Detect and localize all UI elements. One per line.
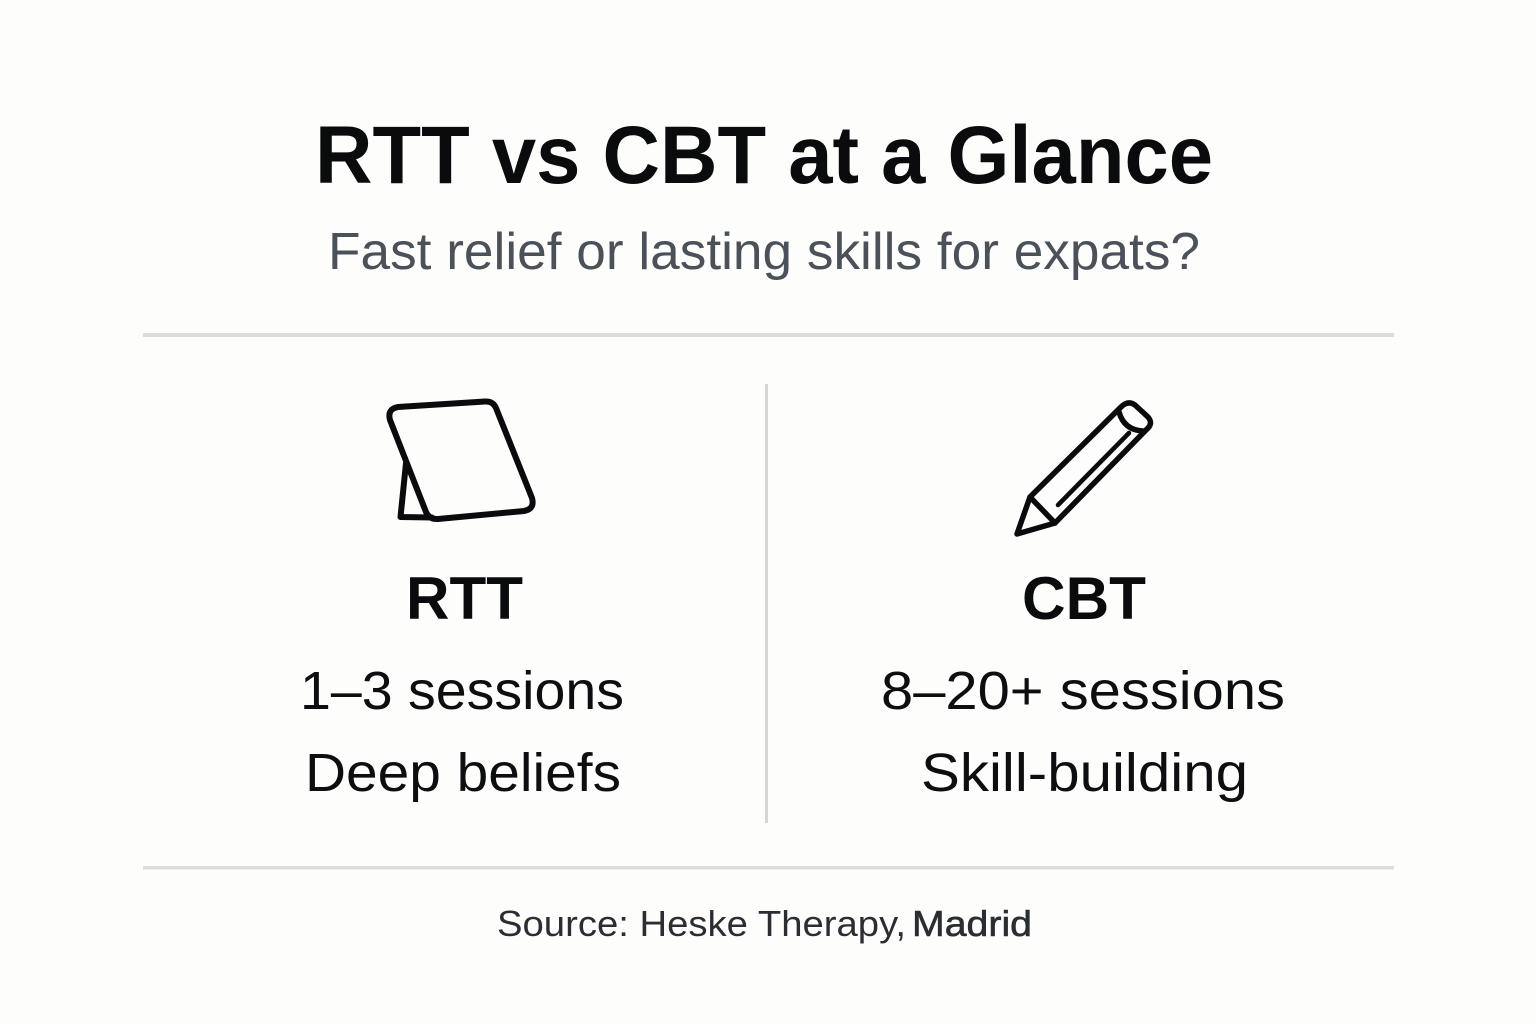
title: RTT vs CBT at a Glance xyxy=(315,110,1213,201)
text: sessions: 1–3 sessions xyxy=(300,661,624,721)
heading: RTT: RTT xyxy=(406,565,523,632)
text: focus: Skill-building xyxy=(921,743,1248,803)
source note: Source: Heske Therapy, xyxy=(497,903,906,944)
subtitle: Fast relief or lasting skills for expats? xyxy=(328,223,1200,281)
icon: pencil xyxy=(1017,403,1150,534)
panel: RTT xyxy=(300,401,624,803)
heading: CBT: CBT xyxy=(1022,565,1146,632)
source note: Madrid xyxy=(912,903,1032,944)
text: focus: Deep beliefs xyxy=(305,743,621,803)
text: sessions: 8–20+ sessions xyxy=(881,661,1285,721)
icon: tablet on stand xyxy=(389,401,533,519)
panel: CBT xyxy=(881,403,1285,803)
